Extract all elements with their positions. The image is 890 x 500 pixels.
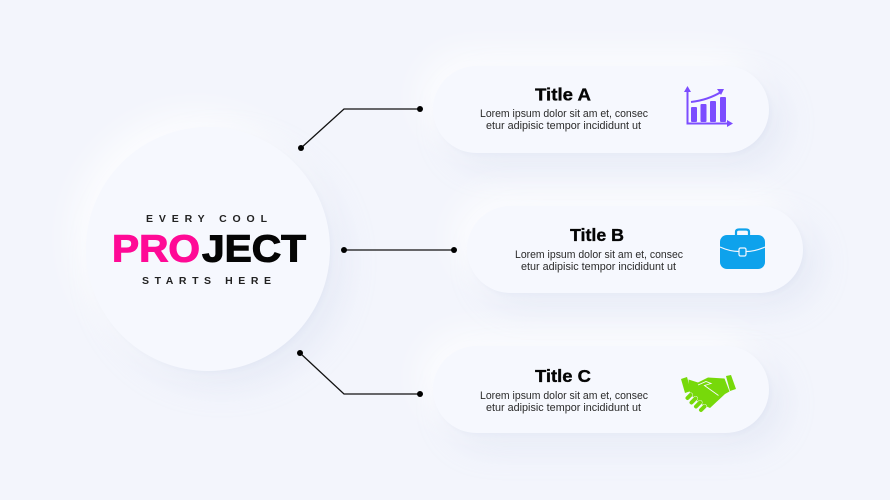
description C line 2: etur adipisic tempor incididunt ut: [486, 402, 641, 414]
connector to card C: [297, 350, 423, 397]
panel: central circle: [86, 127, 330, 371]
connector to card B: [341, 247, 457, 253]
text: PRO: PRO: [112, 228, 200, 270]
description C: Lorem ipsum dolor sit am et, consec: [480, 390, 648, 402]
central heading: [112, 213, 306, 287]
icon: bar chart: [684, 86, 733, 127]
card B text: [515, 225, 683, 273]
description A line 2: etur adipisic tempor incididunt ut: [486, 120, 641, 132]
panel: card C: [433, 346, 769, 433]
text: starts here: STARTS HERE: [142, 275, 271, 287]
icon: briefcase: [720, 230, 765, 269]
description A: Lorem ipsum dolor sit am et, consec: [480, 108, 648, 120]
panel: card A: [433, 66, 769, 153]
title B: Title B: [570, 225, 624, 245]
card A text: [480, 84, 648, 132]
description B line 2: etur adipisic tempor incididunt ut: [521, 261, 676, 273]
text: JECT: JECT: [202, 228, 306, 270]
title A: Title A: [535, 84, 591, 104]
connector to card A: [298, 106, 423, 151]
title C: Title C: [535, 366, 591, 386]
card C text: [480, 366, 648, 414]
description B: Lorem ipsum dolor sit am et, consec: [515, 249, 683, 261]
icon: handshake: [681, 375, 736, 410]
panel: card B: [467, 206, 803, 293]
text: every cool: EVERY COOL: [146, 213, 268, 225]
